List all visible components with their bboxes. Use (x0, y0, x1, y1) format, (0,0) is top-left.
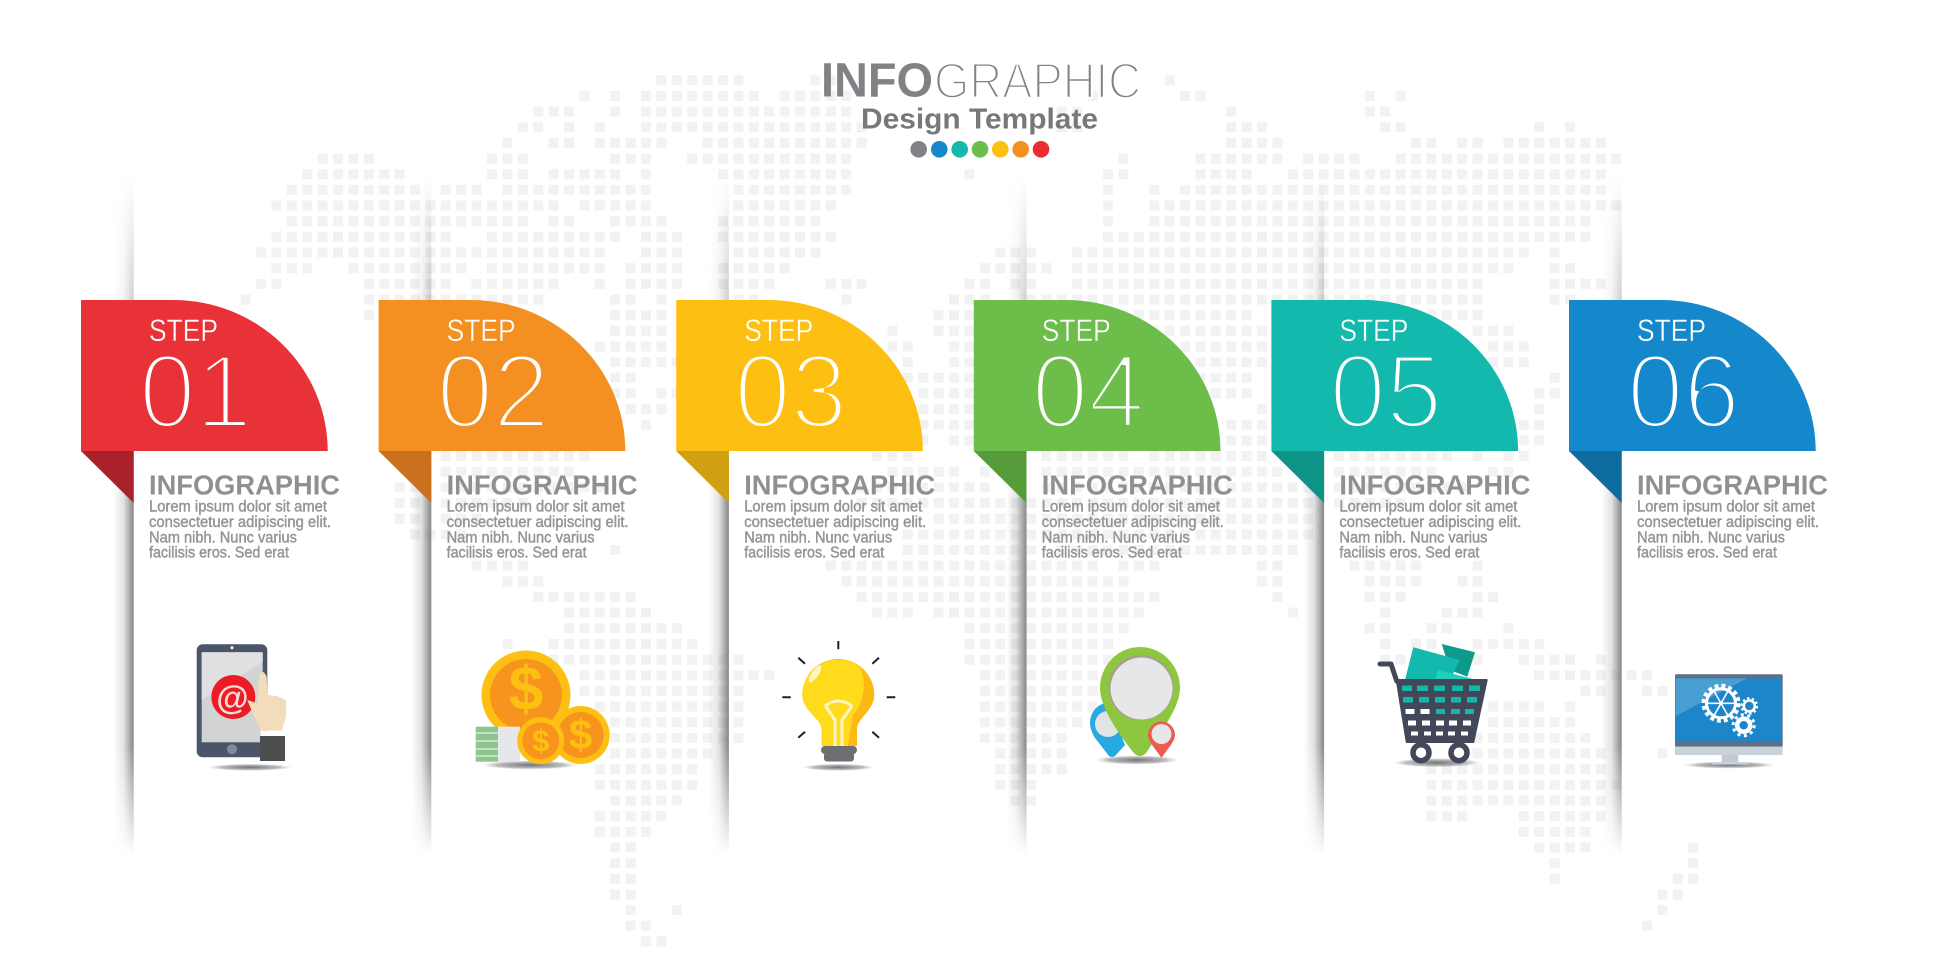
header title (821, 52, 1141, 158)
body text: facilisis eros. Sed erat (447, 545, 587, 562)
step label: STEP (1339, 312, 1408, 348)
step label: STEP (447, 312, 516, 348)
body text: Nam nibh. Nunc varius (1339, 529, 1488, 546)
flag (676, 300, 923, 451)
step label: STEP (149, 312, 218, 348)
heading: INFOGRAPHIC (744, 470, 935, 501)
body text: Nam nibh. Nunc varius (1042, 529, 1190, 546)
body text: Nam nibh. Nunc varius (1637, 529, 1785, 546)
body text (744, 499, 926, 562)
body text (149, 499, 331, 562)
fold (676, 451, 729, 503)
body text: Lorem ipsum dolor sit amet (744, 499, 923, 516)
fold (379, 451, 431, 503)
background world map of dots (241, 80, 1704, 941)
body text: facilisis eros. Sed erat (744, 545, 885, 562)
icon: coins and banknotes: $ (509, 655, 543, 724)
body text (1042, 499, 1224, 562)
step number: 06 (1627, 334, 1740, 450)
body text: facilisis eros. Sed erat (1339, 545, 1480, 562)
panel: step 03 (676, 300, 935, 562)
body text: Nam nibh. Nunc varius (744, 529, 892, 546)
subtitle: Design Template (861, 104, 1098, 136)
icon: map pins (1090, 647, 1180, 764)
panel: step 04 (974, 300, 1233, 562)
icon: tablet with hand (197, 644, 292, 771)
body text: facilisis eros. Sed erat (1042, 545, 1182, 562)
step label: STEP (1042, 312, 1111, 348)
fold (974, 451, 1026, 503)
step label: STEP (1637, 312, 1706, 348)
step label: STEP (744, 312, 813, 348)
column shadows (114, 175, 1622, 855)
body text (447, 499, 629, 562)
flag (974, 300, 1220, 451)
body text: consectetuer adipiscing elit. (149, 514, 331, 531)
step number: 02 (437, 334, 550, 450)
flag (81, 300, 328, 451)
panel: step 06 (1569, 300, 1828, 562)
panel: step 05 (1271, 300, 1530, 562)
body text: Lorem ipsum dolor sit amet (447, 499, 625, 516)
body text: consectetuer adipiscing elit. (1339, 514, 1521, 531)
body text: consectetuer adipiscing elit. (1042, 514, 1224, 531)
icon: coins and banknotes (476, 650, 610, 770)
heading: INFOGRAPHIC (447, 470, 638, 501)
title word INFO: INFO (821, 54, 933, 108)
heading: INFOGRAPHIC (149, 470, 340, 501)
step number: 03 (734, 334, 847, 450)
body text: Nam nibh. Nunc varius (447, 529, 595, 546)
step number: 04 (1032, 334, 1145, 450)
body text (1637, 499, 1819, 562)
flag (379, 300, 625, 451)
body text: Lorem ipsum dolor sit amet (149, 499, 328, 516)
fold (81, 451, 134, 503)
flag (1569, 300, 1816, 451)
title word GRAPHIC: GRAPHIC (934, 52, 1141, 109)
heading: INFOGRAPHIC (1042, 470, 1233, 501)
panel: step 02 (379, 300, 638, 562)
body text: Nam nibh. Nunc varius (149, 529, 297, 546)
panel: step 01 (81, 300, 340, 562)
step number: 05 (1329, 334, 1442, 450)
body text: consectetuer adipiscing elit. (1637, 514, 1819, 531)
icon: light bulb (782, 641, 895, 771)
step number: 01 (139, 334, 252, 450)
icon: shopping cart (1380, 644, 1487, 767)
icon: coins and banknotes: $ (532, 723, 549, 758)
body text: Lorem ipsum dolor sit amet (1042, 499, 1220, 516)
colour dots (910, 141, 1049, 158)
heading: INFOGRAPHIC (1637, 470, 1828, 501)
icon: coins and banknotes: $ (569, 711, 592, 758)
icon: monitor with gears (1675, 674, 1783, 768)
body text: Lorem ipsum dolor sit amet (1637, 499, 1816, 516)
body text: facilisis eros. Sed erat (1637, 545, 1778, 562)
icon: tablet with hand: @ (216, 679, 249, 716)
heading: INFOGRAPHIC (1339, 470, 1530, 501)
flag (1271, 300, 1518, 451)
body text: facilisis eros. Sed erat (149, 545, 290, 562)
body text: consectetuer adipiscing elit. (447, 514, 629, 531)
body text (1339, 499, 1521, 562)
fold (1569, 451, 1622, 503)
body text: consectetuer adipiscing elit. (744, 514, 926, 531)
body text: Lorem ipsum dolor sit amet (1339, 499, 1518, 516)
fold (1271, 451, 1324, 503)
